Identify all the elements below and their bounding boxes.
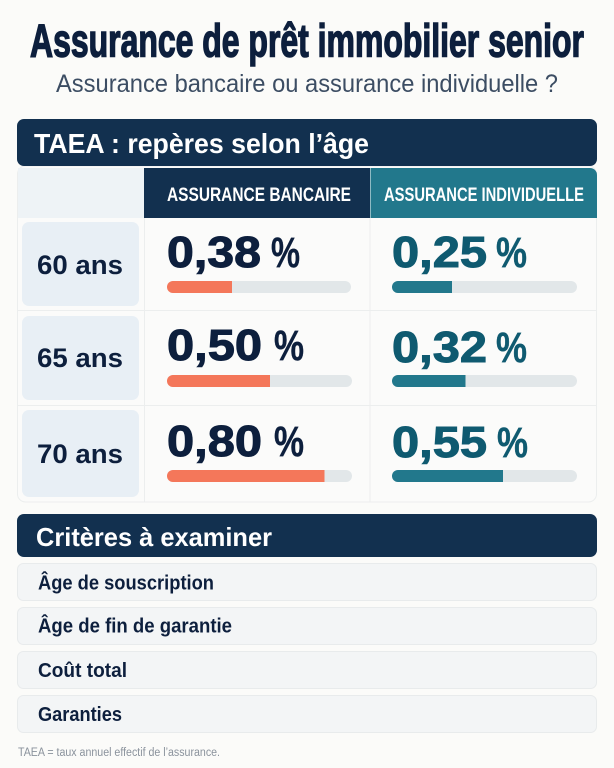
value: bancaire 0,50 %: % [274, 322, 304, 370]
table body [18, 166, 596, 502]
column header: assurance bancaire: ASSURANCE BANCAIRE [167, 184, 351, 206]
panel: TAEA table [17, 119, 597, 502]
value: individuelle 0,32 %: 0,32 [392, 323, 487, 372]
bar: individuelle 0,32 % [392, 375, 577, 387]
age label: 60 ans [22, 222, 139, 306]
bar: individuelle 0,55 % [392, 470, 577, 482]
criterion: garanties [18, 696, 596, 732]
row: 70 ans [22, 410, 577, 497]
value: bancaire 0,50 %: 0,50 [167, 321, 262, 370]
value: individuelle 0,25 %: 0,25 [392, 228, 487, 277]
age label: 70 ans: 70 ans [37, 439, 123, 469]
criterion: âge de souscription [18, 564, 596, 600]
value: individuelle 0,55 %: % [497, 419, 528, 467]
value: bancaire 0,38 %: % [271, 229, 300, 277]
criterion: coût total: Coût total [38, 659, 127, 682]
column header: assurance individuelle [370, 168, 597, 218]
row: 65 ans [22, 316, 577, 400]
value: bancaire 0,38 %: 0,38 [167, 228, 261, 277]
value: individuelle 0,55 %: 0,55 [392, 418, 487, 467]
value: individuelle 0,25 % [392, 228, 527, 277]
value: bancaire 0,80 % [167, 417, 304, 466]
value: bancaire 0,50 % [167, 321, 304, 370]
section header: TAEA [17, 119, 597, 166]
bar: bancaire 0,80 % [167, 470, 352, 482]
value: individuelle 0,32 %: % [496, 324, 527, 372]
criterion: garanties: Garanties [38, 703, 122, 726]
criterion: âge de souscription: Âge de souscription [38, 570, 214, 594]
criterion: âge de fin de garantie [18, 608, 596, 644]
section header: critères: Critères à examiner [36, 522, 272, 552]
value: bancaire 0,80 %: 0,80 [167, 417, 262, 466]
bar: individuelle 0,25 % [392, 281, 577, 293]
value: individuelle 0,25 %: % [496, 229, 527, 277]
panel: critères à examiner [17, 514, 597, 732]
value: bancaire 0,80 %: % [274, 418, 304, 466]
section header: TAEA: TAEA : repères selon l’âge [34, 128, 369, 159]
footnote: TAEA = taux annuel effectif de l’assurance. [18, 747, 220, 759]
empty header cell [18, 168, 144, 218]
age label: 65 ans [22, 316, 139, 400]
column header: assurance bancaire [144, 168, 370, 218]
value: individuelle 0,55 % [392, 418, 528, 467]
value: bancaire 0,38 % [167, 228, 300, 277]
age label: 60 ans: 60 ans [37, 250, 123, 280]
bar: bancaire 0,38 % [167, 281, 351, 293]
criterion: coût total [18, 652, 596, 688]
criterion: âge de fin de garantie: Âge de fin de garantie [38, 614, 232, 638]
section header: critères [17, 514, 597, 557]
row: 60 ans [22, 222, 577, 306]
value: individuelle 0,32 % [392, 323, 527, 372]
age label: 70 ans [22, 410, 139, 497]
subtitle: Assurance bancaire ou assurance individuelle ? [56, 70, 558, 98]
bar: bancaire 0,50 % [167, 375, 352, 387]
age label: 65 ans: 65 ans [37, 343, 123, 373]
